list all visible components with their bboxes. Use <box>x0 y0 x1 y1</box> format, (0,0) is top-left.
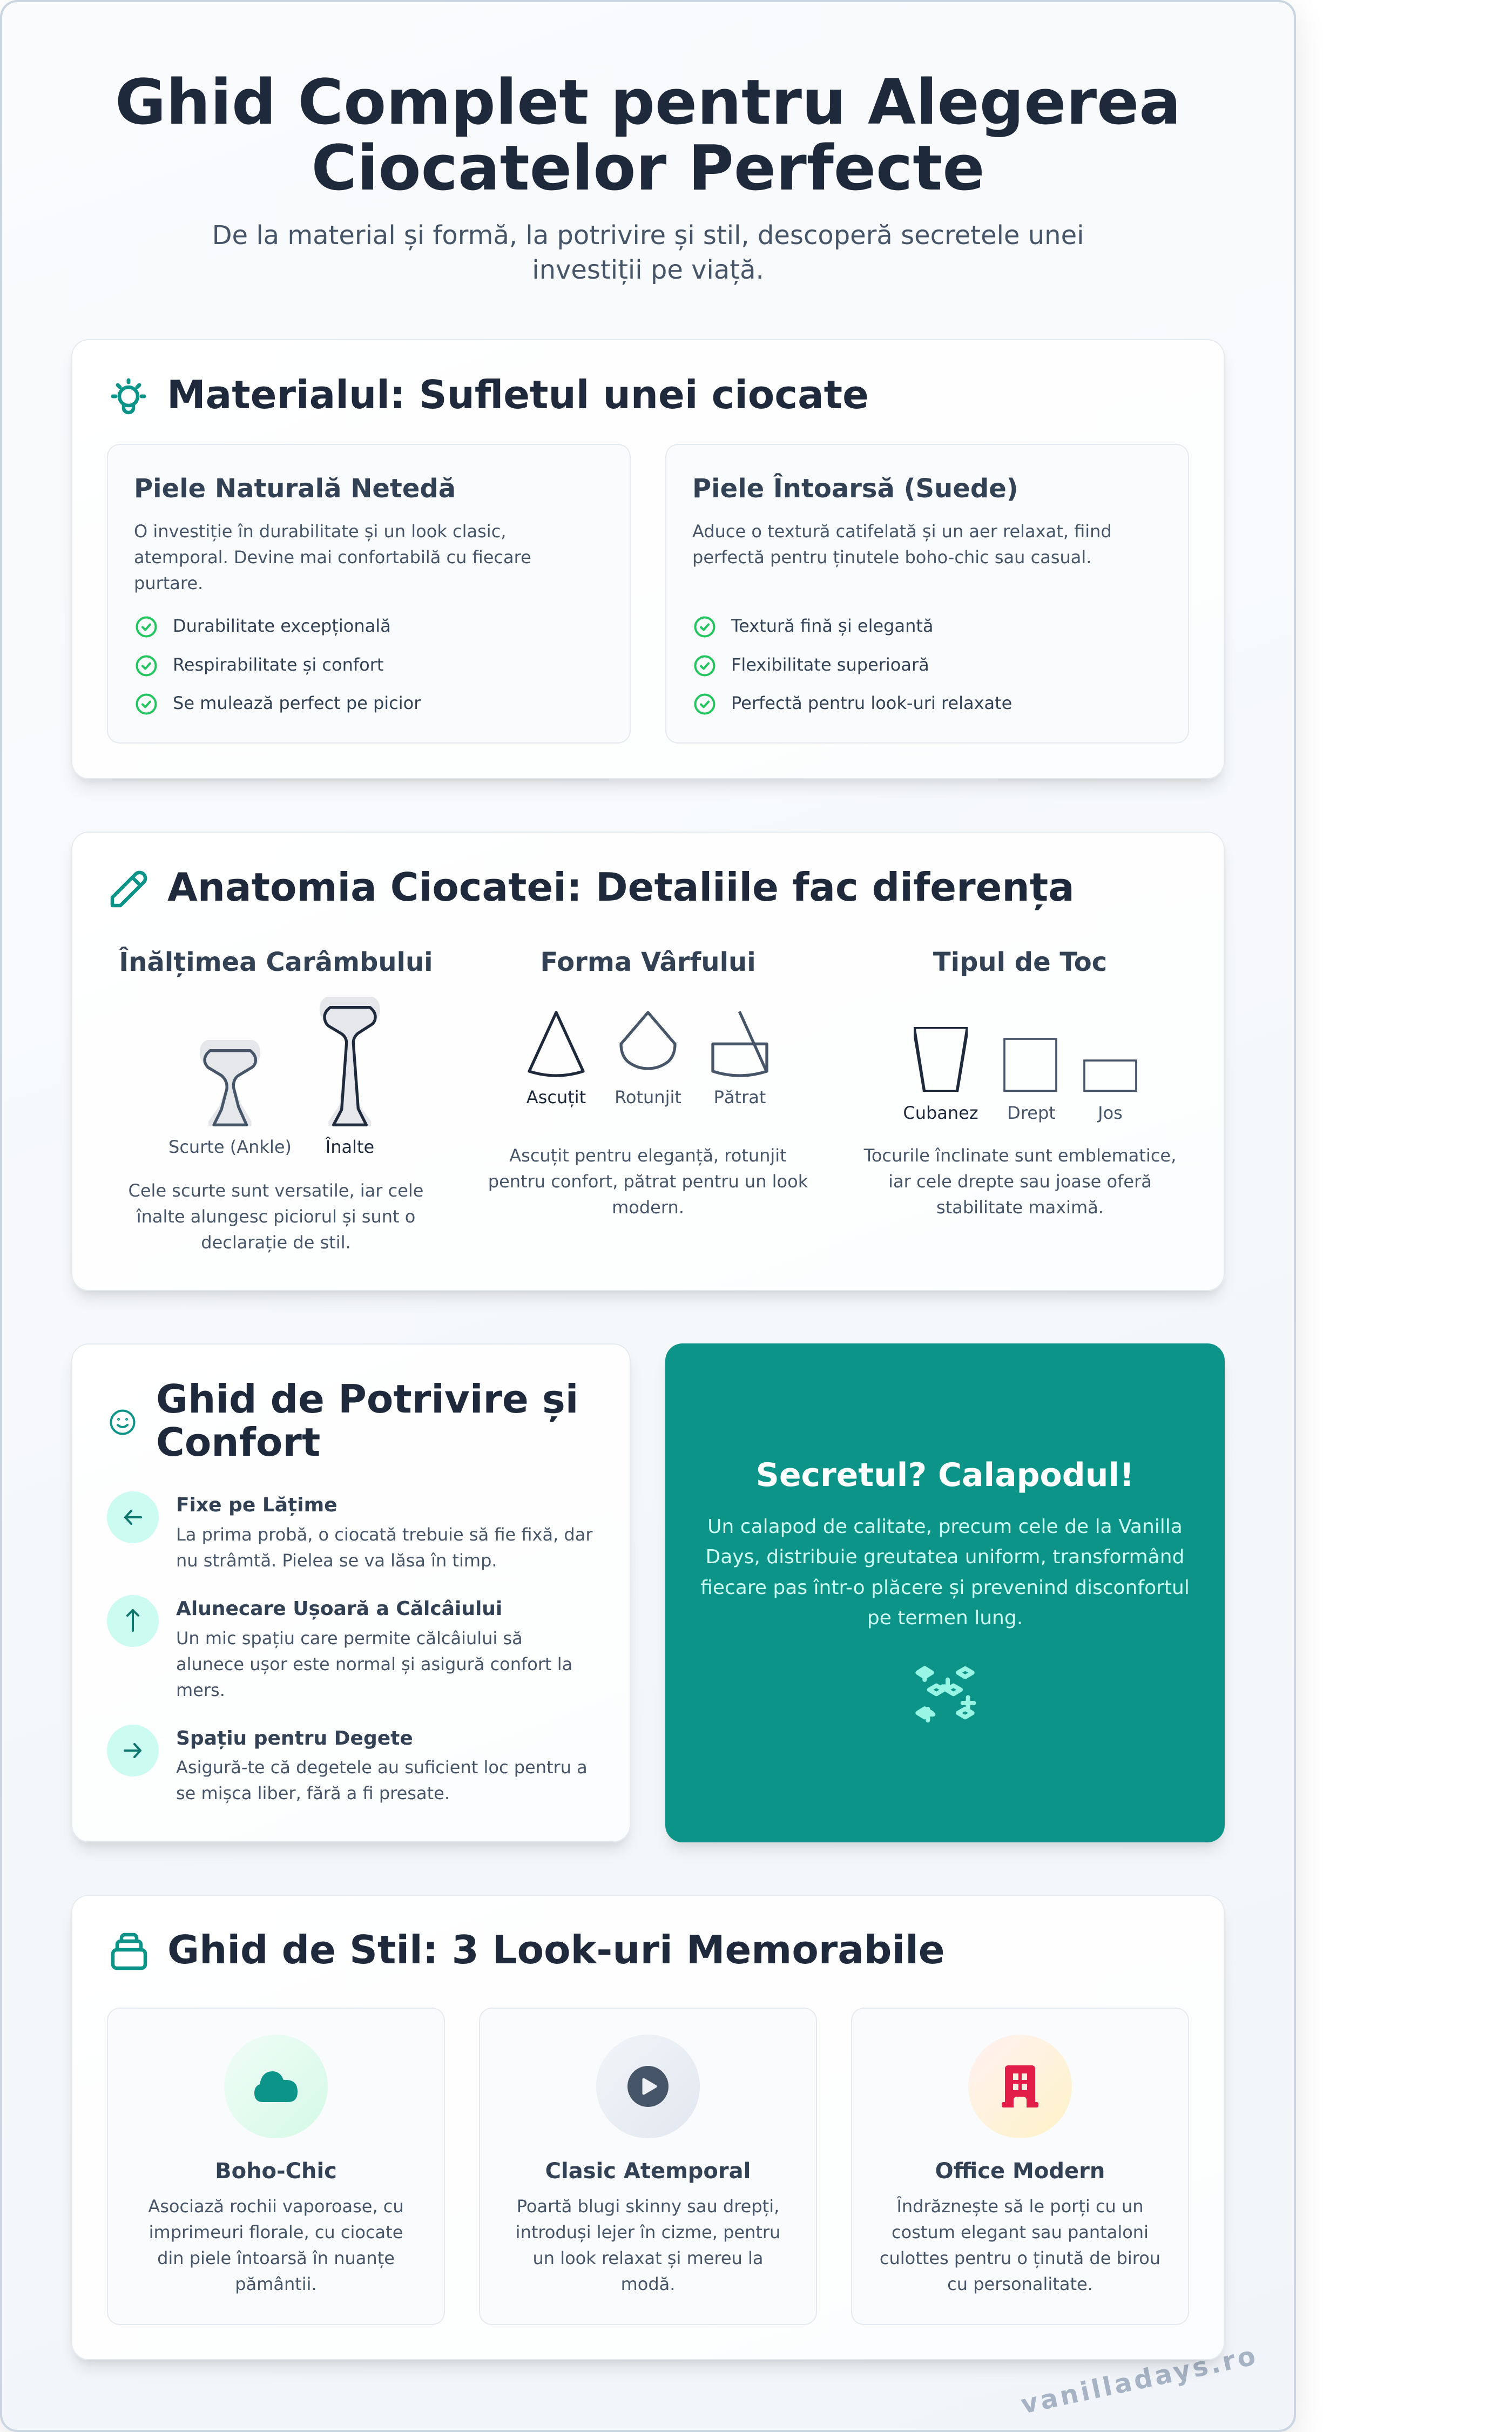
icon: lightbulb <box>111 378 146 415</box>
callout text: Days, distribuie greutatea uniform, transformând <box>706 1546 1184 1568</box>
icon: smile <box>110 1409 135 1435</box>
panel: material <box>71 339 1225 779</box>
card title: Boho-Chic <box>215 2159 337 2184</box>
card: smooth leather <box>107 444 631 744</box>
step text <box>176 1754 588 1806</box>
icon: check <box>694 693 715 715</box>
card description: perfectă pentru ținutele boho-chic sau casual. <box>692 547 1091 568</box>
step text <box>176 1625 572 1703</box>
diagram: toes <box>528 1011 768 1077</box>
step text: La prima probă, o ciocată trebuie să fie fixă, dar <box>176 1524 593 1545</box>
callout text: fiecare pas într-o plăcere și prevenind disconfortul <box>700 1577 1190 1599</box>
column description: Ascuțit pentru eleganță, rotunjit <box>509 1145 787 1166</box>
label: Drept <box>1007 1103 1056 1123</box>
step title: Spațiu pentru Degete <box>176 1727 413 1749</box>
subtitle <box>212 220 1084 285</box>
label: Ascuțit <box>526 1087 586 1107</box>
column: toe shape <box>488 947 808 1218</box>
list item: Se mulează perfect pe picior <box>173 693 421 713</box>
icon: building <box>968 2035 1072 2138</box>
column description <box>488 1145 808 1218</box>
column description: înalte alungesc piciorul și sunt o <box>137 1206 415 1227</box>
column description: declarație de stil. <box>201 1232 351 1253</box>
column description: Tocurile înclinate sunt emblematice, <box>864 1145 1176 1166</box>
label: Jos <box>1098 1103 1123 1123</box>
column heading: Forma Vârfului <box>540 947 756 977</box>
card title: Clasic Atemporal <box>545 2159 751 2184</box>
icon: check <box>136 693 157 715</box>
column description: modern. <box>612 1197 684 1218</box>
icon: check <box>694 617 715 637</box>
card text: cu personalitate. <box>947 2274 1093 2294</box>
subtitle: investiții pe viață. <box>532 255 764 285</box>
card description: Aduce o textură catifelată și un aer relaxat, fiind <box>692 521 1112 542</box>
callout text: Un calapod de calitate, precum cele de la Vanilla <box>707 1516 1183 1538</box>
rounded toe <box>621 1012 675 1069</box>
step text: Un mic spațiu care permite călcâiului să <box>176 1628 523 1649</box>
card heading: Piele Întoarsă (Suede) <box>692 474 1018 504</box>
column: shaft height <box>119 947 433 1253</box>
square toe <box>713 1011 767 1076</box>
panel: callout last secret <box>665 1343 1225 1842</box>
label: Rotunjit <box>615 1087 681 1107</box>
list item: Perfectă pentru look-uri relaxate <box>731 693 1012 713</box>
callout text: pe termen lung. <box>867 1607 1023 1629</box>
icon: check <box>136 617 157 637</box>
step title: Alunecare Ușoară a Călcâiului <box>176 1598 502 1620</box>
card text: Poartă blugi skinny sau drepți, <box>517 2196 779 2217</box>
icon: check <box>136 656 157 676</box>
icon: stacked box <box>111 1933 147 1970</box>
icon: check <box>694 656 715 676</box>
list item: Flexibilitate superioară <box>731 654 929 675</box>
icon: up arrow <box>107 1595 159 1647</box>
card text: un look relaxat și mereu la <box>532 2248 764 2268</box>
column description <box>129 1180 423 1253</box>
card description <box>134 521 531 593</box>
icon: play <box>596 2035 700 2138</box>
column description: pentru confort, pătrat pentru un look <box>488 1171 808 1192</box>
card heading: Piele Naturală Netedă <box>134 474 456 504</box>
column: heel type <box>864 947 1176 1218</box>
heading: style guide: Ghid de Stil: 3 Look-uri Memorabile <box>167 1927 945 1972</box>
pointed toe <box>529 1012 583 1076</box>
card text: Asociază rochii vaporoase, cu <box>148 2196 404 2217</box>
low heel <box>1084 1060 1136 1091</box>
card text: culottes pentru o ținută de birou <box>880 2248 1160 2268</box>
cuban heel <box>914 1027 968 1092</box>
heading: anatomy: Anatomia Ciocatei: Detaliile fac diferența <box>167 864 1075 910</box>
icon: pencil <box>110 870 147 907</box>
column heading: Tipul de Toc <box>933 947 1107 977</box>
tall boot <box>320 997 380 1126</box>
column description: iar cele drepte sau joase oferă <box>888 1171 1152 1192</box>
diagram: boots <box>200 997 380 1126</box>
label: Înalte <box>326 1137 374 1157</box>
panel: anatomy <box>71 832 1225 1291</box>
step text: nu strâmtă. Pielea se va lăsa în timp. <box>176 1550 497 1571</box>
step text: se mișca liber, fără a fi presate. <box>176 1783 450 1803</box>
diagram: heels <box>914 1027 1137 1092</box>
title <box>115 66 1181 205</box>
card description: atemporal. Devine mai confortabilă cu fiecare <box>134 547 531 568</box>
card description: O investiție în durabilitate și un look clasic, <box>134 521 506 542</box>
column description: Cele scurte sunt versatile, iar cele <box>129 1180 423 1201</box>
title: Ciocatelor Perfecte <box>312 132 984 205</box>
column heading: Înălțimea Carâmbului <box>119 947 433 977</box>
card: classic <box>479 2008 817 2325</box>
heading: fit guide: Confort <box>156 1420 320 1465</box>
step text: alunece ușor este normal și asigură confort la <box>176 1654 572 1674</box>
callout heading: Secretul? Calapodul! <box>756 1456 1134 1494</box>
card description <box>692 521 1112 568</box>
label: Cubanez <box>903 1103 978 1123</box>
card title: Office Modern <box>935 2159 1105 2184</box>
label: Scurte (Ankle) <box>168 1137 292 1157</box>
icon: last pattern <box>896 1641 1004 1749</box>
step title: Fixe pe Lățime <box>176 1494 338 1516</box>
card text: introduși lejer în cizme, pentru <box>516 2222 780 2242</box>
card text: pământii. <box>235 2274 317 2294</box>
list item: Durabilitate excepțională <box>173 616 391 636</box>
step: heel slip <box>107 1595 604 1703</box>
card: suede <box>665 444 1189 744</box>
card: office <box>851 2008 1189 2325</box>
card text <box>479 2193 817 2297</box>
card text: costum elegant sau pantaloni <box>892 2222 1149 2242</box>
callout text <box>665 1512 1225 1633</box>
step text <box>176 1522 593 1573</box>
straight heel <box>1004 1039 1056 1091</box>
title: Ghid Complet pentru Alegerea <box>115 66 1181 139</box>
step text: Asigură-te că degetele au suficient loc pentru a <box>176 1757 588 1778</box>
heading: fit guide <box>156 1376 578 1465</box>
subtitle: De la material și formă, la potrivire și stil, descoperă secretele unei <box>212 220 1084 251</box>
step: width <box>107 1491 604 1572</box>
panel: fit guide <box>71 1343 631 1842</box>
heading: fit guide: Ghid de Potrivire și <box>156 1376 578 1422</box>
card text <box>107 2193 445 2297</box>
card text: modă. <box>621 2274 675 2294</box>
card description: purtare. <box>134 573 203 593</box>
list item: Textură fină și elegantă <box>731 616 934 636</box>
label: Pătrat <box>714 1087 766 1107</box>
icon: left arrow <box>107 1491 159 1543</box>
panel: style guide <box>71 1895 1225 2360</box>
card text <box>851 2193 1189 2297</box>
icon: cloud <box>224 2035 328 2138</box>
step: toes <box>107 1725 604 1806</box>
card: boho <box>107 2008 445 2325</box>
column description: stabilitate maximă. <box>936 1197 1104 1218</box>
card text: Îndrăznește să le porți cu un <box>896 2196 1144 2217</box>
short boot <box>200 1040 260 1126</box>
watermark: vanilladays.ro <box>1018 2340 1260 2420</box>
list item: Respirabilitate și confort <box>173 654 383 675</box>
heading: material: Materialul: Sufletul unei ciocate <box>167 372 869 417</box>
card text: din piele întoarsă în nuanțe <box>157 2248 395 2268</box>
step text: mers. <box>176 1680 225 1700</box>
column description <box>864 1145 1176 1218</box>
icon: right arrow <box>107 1725 159 1776</box>
card text: imprimeuri florale, cu ciocate <box>149 2222 403 2242</box>
